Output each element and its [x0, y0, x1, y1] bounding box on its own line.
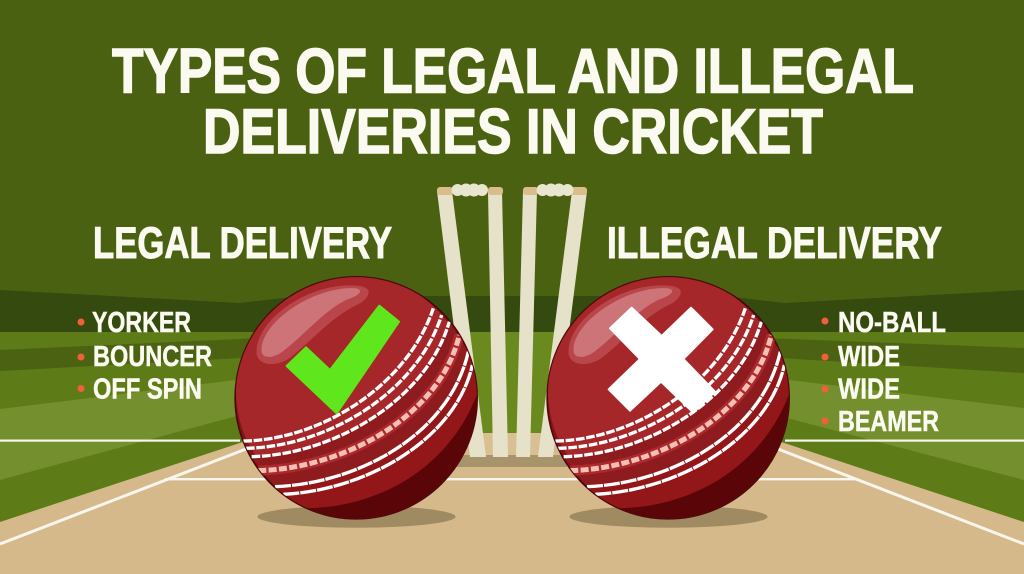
cricket pitch [0, 433, 1024, 574]
title: DELIVERIES IN CRICKET [203, 97, 823, 167]
icon: white cross [609, 308, 715, 413]
list: illegal deliveries: WIDE [838, 341, 900, 373]
list: legal deliveries: YORKER [92, 307, 191, 339]
title [112, 36, 914, 167]
list: legal deliveries: OFF SPIN [93, 374, 202, 406]
legal cricket ball with green tick [235, 274, 487, 527]
icon: green check mark [287, 306, 399, 413]
list: illegal deliveries: BEAMER [838, 406, 939, 438]
list: legal deliveries [78, 307, 212, 406]
wickets: stumps and bails [437, 184, 587, 467]
heading: legal delivery: LEGAL DELIVERY [93, 219, 392, 268]
list: legal deliveries: BOUNCER [93, 341, 212, 373]
list: illegal deliveries: NO-BALL [838, 307, 946, 339]
list: illegal deliveries [822, 307, 946, 438]
shadow under illegal ball [570, 506, 768, 528]
shadow under legal ball [258, 506, 456, 528]
illegal cricket ball with white cross [547, 274, 799, 527]
heading: illegal delivery: ILLEGAL DELIVERY [607, 219, 942, 268]
list: illegal deliveries: WIDE [838, 374, 900, 406]
